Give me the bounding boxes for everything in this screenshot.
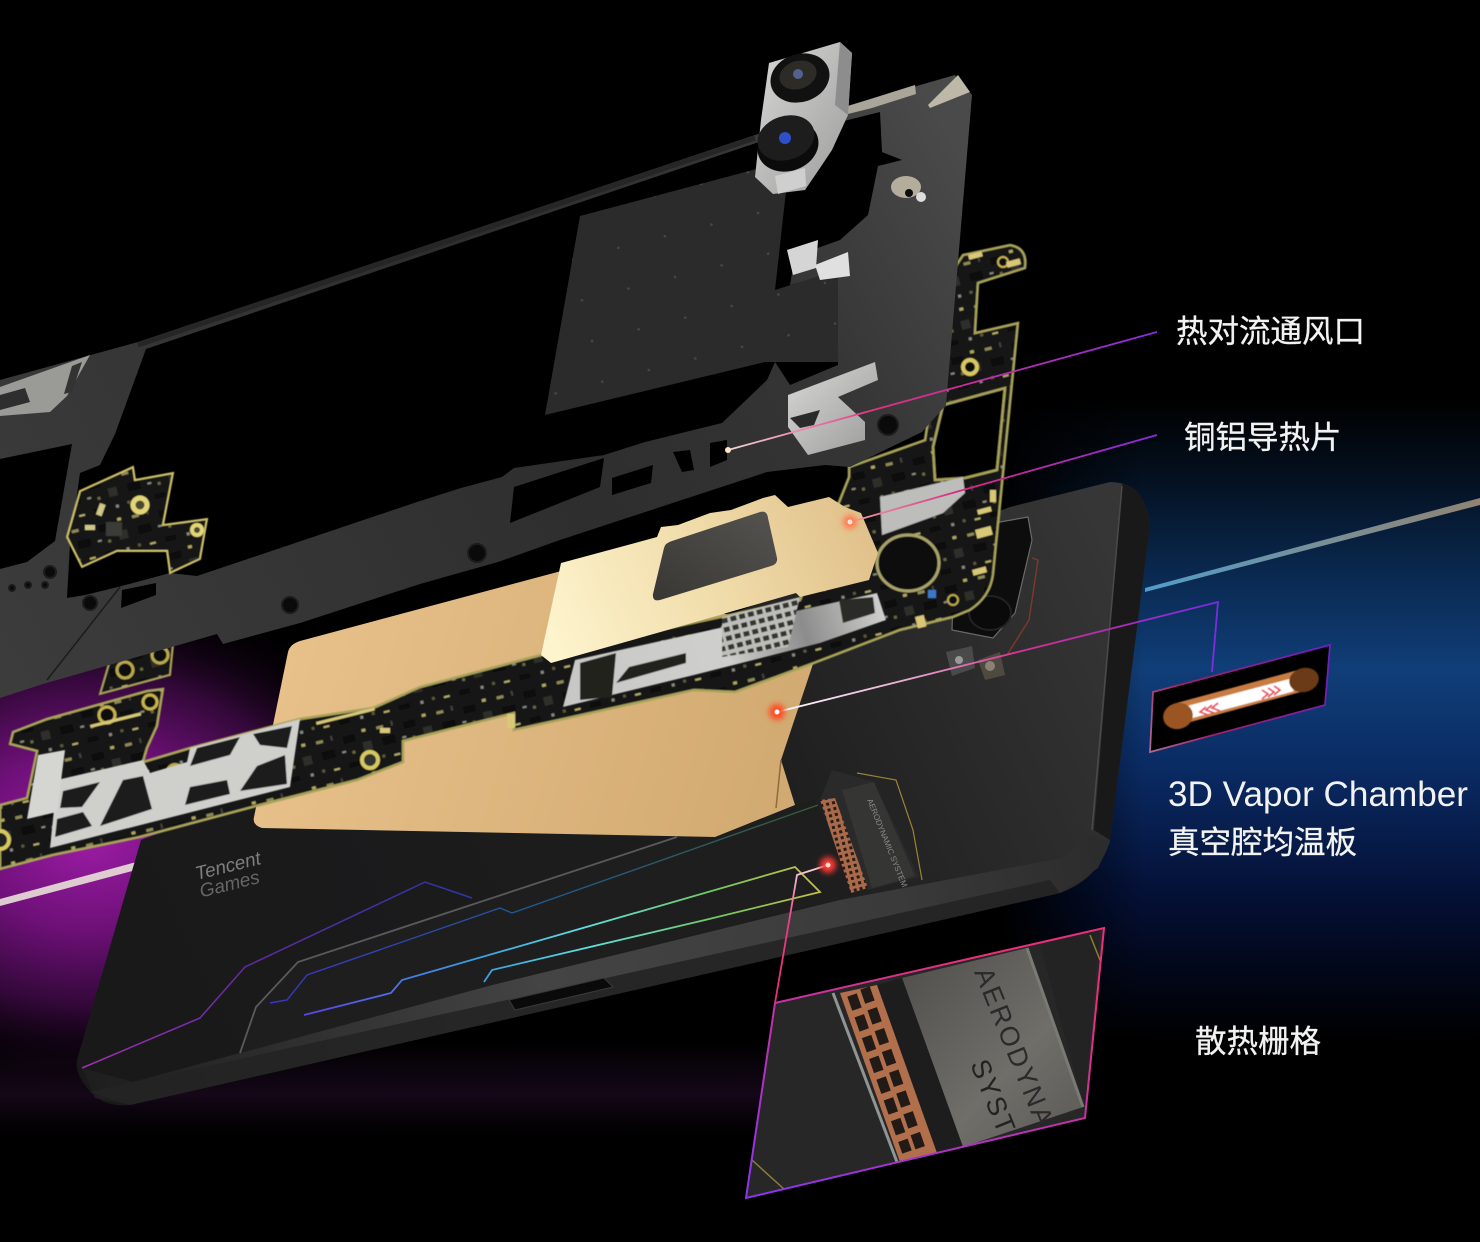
inset border — [746, 928, 1104, 1198]
right board shield — [880, 477, 965, 535]
groove panel — [240, 800, 860, 1053]
inset photo — [747, 930, 1103, 1196]
bottom lip — [82, 835, 1110, 1105]
bottom port — [509, 978, 613, 1010]
top metal strip — [848, 85, 916, 114]
leader: grille — [775, 865, 828, 1003]
thin top bar — [138, 138, 755, 345]
left silver patch — [0, 355, 90, 416]
phone body — [77, 482, 1150, 1105]
frame outer — [0, 75, 972, 698]
flex connector — [775, 168, 806, 194]
light streak left — [0, 861, 140, 906]
camera — [751, 42, 852, 194]
tube — [1160, 665, 1322, 732]
leader: vapor chamber — [777, 602, 1218, 712]
rgb line — [304, 867, 820, 1015]
vent label: AERODYNAMIC SYSTEM — [865, 797, 909, 889]
lower shadow band — [90, 880, 1060, 1105]
board outline — [0, 245, 1025, 869]
left opening — [0, 444, 72, 569]
shield chip — [653, 512, 777, 600]
board window — [933, 388, 1005, 480]
silver block — [27, 750, 65, 819]
dark inner plate — [545, 160, 838, 415]
right rim — [1094, 484, 1150, 840]
light streak right — [1145, 498, 1480, 592]
flash chips — [946, 646, 975, 676]
label: vapor chamber cn: 真空腔均温板 — [1168, 824, 1357, 860]
lens upper — [764, 46, 836, 110]
upper small board — [67, 467, 207, 573]
silver bracket — [788, 362, 878, 455]
leader: convection vent — [728, 332, 1157, 450]
lower small boards — [100, 645, 173, 694]
mid frame — [0, 75, 972, 698]
logo: Games — [197, 867, 262, 902]
label: vapor chamber en: 3D Vapor Chamber — [1168, 775, 1468, 814]
inset: grille — [740, 920, 1110, 1210]
phone back — [77, 482, 1150, 1105]
lighting lines — [82, 805, 820, 1068]
engraved text: AERODYNA — [968, 963, 1059, 1130]
frame opening — [67, 112, 902, 598]
cream shield — [541, 495, 878, 663]
blue line — [270, 805, 818, 1003]
lens lower — [751, 108, 825, 179]
leader lines — [728, 332, 1218, 1003]
board rings — [998, 257, 1008, 267]
label: grille: 散热栅格 — [1195, 1023, 1321, 1059]
leader: heat sink — [850, 435, 1157, 522]
inset: vapor chamber — [1150, 645, 1330, 752]
logo: Tencent — [193, 848, 264, 885]
groove line — [240, 837, 677, 1053]
logo — [193, 848, 268, 902]
label: convection vent: 热对流通风口 — [1176, 313, 1365, 349]
ring mount — [891, 176, 921, 198]
corner tab — [928, 75, 970, 108]
board pads — [90, 251, 1021, 733]
slot openings — [121, 440, 727, 608]
left silver shield — [27, 719, 300, 848]
label: heat sink: 铜铝导热片 — [1184, 419, 1342, 455]
inset photo: SYST — [964, 1055, 1022, 1139]
markers — [725, 447, 857, 873]
purple line — [82, 882, 472, 1068]
inset frame — [1150, 645, 1330, 752]
main circuit board — [0, 245, 1025, 869]
frame seam — [47, 587, 120, 680]
thermal pads — [787, 240, 818, 275]
copper heat sheet — [254, 570, 820, 837]
screw holes — [9, 415, 898, 613]
large camera opening — [877, 535, 939, 591]
camera body — [755, 42, 852, 194]
right silver shield — [563, 593, 886, 707]
camera module — [946, 517, 1038, 680]
aero panel — [820, 770, 922, 893]
